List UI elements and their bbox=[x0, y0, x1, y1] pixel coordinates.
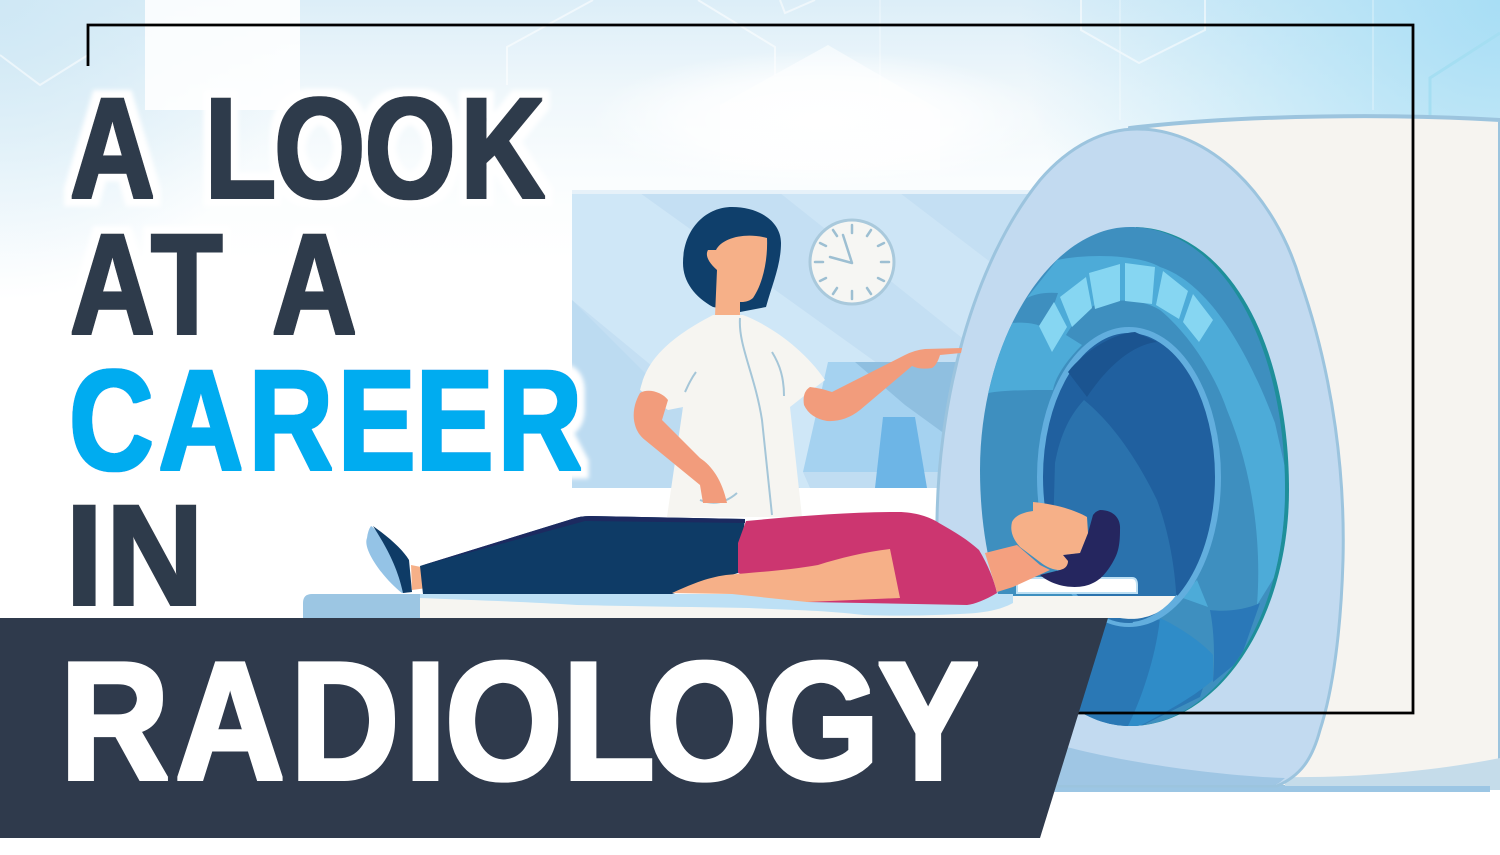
patient trousers bbox=[420, 516, 745, 594]
heading bbox=[65, 68, 582, 635]
heading line: AT A: AT A bbox=[70, 204, 357, 364]
nurse hair bbox=[683, 207, 781, 312]
room window panel bbox=[572, 190, 1030, 488]
computer monitor bbox=[803, 362, 960, 488]
patient bbox=[366, 502, 1120, 605]
scanner front ring bbox=[937, 129, 1343, 786]
heading line: IN: IN bbox=[65, 475, 204, 635]
dark banner bbox=[0, 618, 1108, 838]
nurse face and neck bbox=[707, 236, 767, 316]
scanner base line bbox=[1040, 786, 1490, 792]
scanner light tiles bbox=[1039, 263, 1213, 352]
heading line: CAREER: CAREER bbox=[69, 340, 582, 500]
nurse coat bbox=[640, 315, 825, 517]
scanner inner housing bbox=[975, 222, 1290, 735]
wall clock bbox=[810, 220, 894, 304]
teal rim bbox=[1130, 227, 1289, 726]
patient shirt bbox=[738, 512, 997, 605]
heading line: A LOOK: A LOOK bbox=[70, 68, 545, 228]
pillow bbox=[1017, 578, 1137, 593]
decorative frame bbox=[88, 25, 1413, 713]
scanner body bbox=[1060, 116, 1500, 787]
banner title: RADIOLOGY: RADIOLOGY bbox=[60, 627, 979, 815]
scanner base band bbox=[1285, 758, 1500, 790]
scanner bore bbox=[1040, 330, 1218, 624]
patient shoe bbox=[366, 526, 412, 593]
patient table bbox=[303, 594, 1178, 624]
patient neck bbox=[985, 545, 1050, 592]
patient head bbox=[1011, 502, 1088, 570]
patient hair bbox=[1040, 510, 1120, 587]
nurse bbox=[634, 207, 962, 517]
MRI scanner bbox=[937, 116, 1500, 792]
nurse pointing arm bbox=[804, 348, 962, 421]
patient arm bbox=[672, 549, 900, 602]
nurse left arm bbox=[634, 391, 727, 503]
